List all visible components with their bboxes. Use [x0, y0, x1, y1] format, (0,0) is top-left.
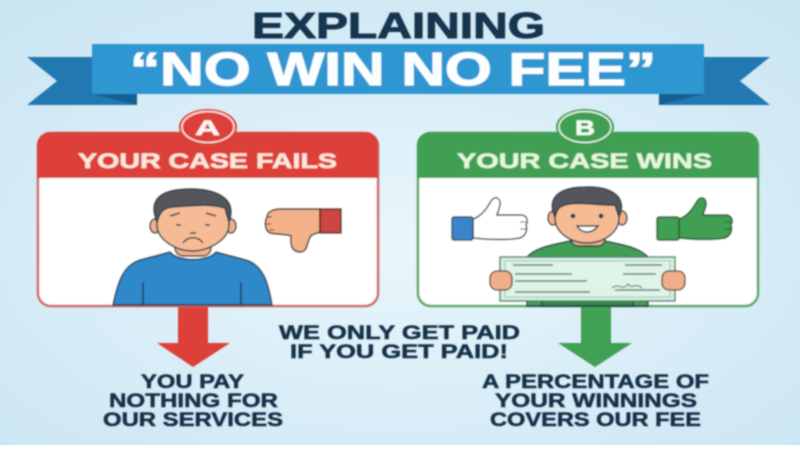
outcome text: you pay nothing: NOTHING FOR	[109, 391, 278, 412]
callout	[279, 323, 520, 363]
banner title: “NO WIN NO FEE”	[130, 43, 656, 95]
outcome text: percentage covers fee: YOUR WINNINGS	[495, 391, 697, 412]
badge B: B	[575, 117, 595, 140]
outcome text: percentage covers fee	[482, 372, 709, 431]
icon: white thumbs up	[452, 198, 527, 240]
sad person	[113, 189, 272, 305]
arrow: green	[558, 307, 632, 367]
badge A	[179, 109, 237, 145]
happy person	[527, 187, 648, 306]
arrow: red	[157, 307, 230, 367]
ribbon banner	[27, 43, 770, 105]
title: explaining: EXPLAINING	[252, 5, 545, 46]
callout: WE ONLY GET PAID	[279, 323, 520, 344]
panel: case wins	[417, 109, 758, 306]
badge B	[556, 109, 614, 145]
callout: IF YOU GET PAID!	[290, 342, 508, 363]
heading: your case wins: YOUR CASE WINS	[457, 150, 712, 173]
outcome text: you pay nothing	[103, 372, 283, 431]
outcome text: you pay nothing: YOU PAY	[141, 372, 244, 393]
badge A: A	[195, 117, 220, 140]
icon: thumbs down	[265, 209, 341, 252]
outcome text: percentage covers fee: COVERS OUR FEE	[490, 410, 701, 431]
heading: your case fails: YOUR CASE FAILS	[78, 150, 337, 173]
hands	[490, 271, 685, 290]
outcome text: you pay nothing: OUR SERVICES	[103, 410, 283, 431]
outcome text: percentage covers fee: A PERCENTAGE OF	[482, 372, 709, 393]
icon: green thumbs up	[657, 198, 732, 240]
panel: case fails	[37, 109, 378, 306]
cheque	[500, 257, 675, 301]
